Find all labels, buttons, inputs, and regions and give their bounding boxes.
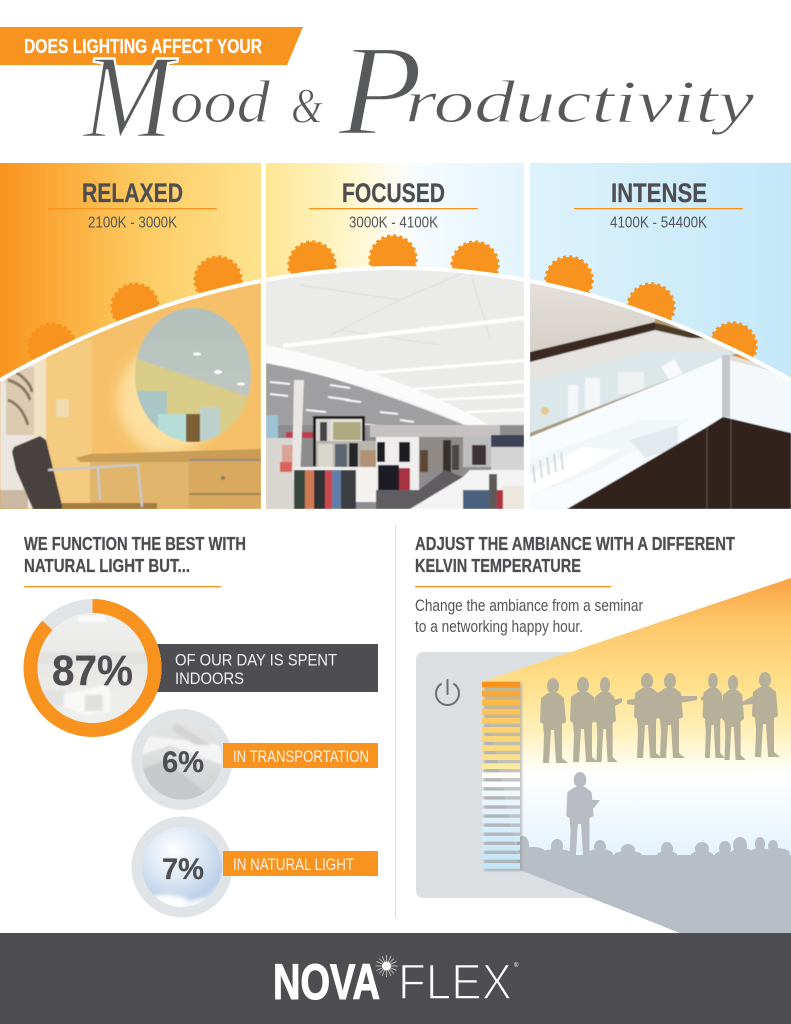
label bar natural light	[223, 851, 378, 876]
icon: suns relaxed	[28, 256, 242, 371]
circle 7%	[132, 816, 232, 918]
icon: suns intense	[545, 256, 757, 370]
logo: Nova Flex: FLEX	[398, 954, 512, 1010]
label bar indoors: INDOORS	[175, 669, 244, 688]
heading: natural light: NATURAL LIGHT BUT...	[24, 556, 190, 576]
banner text: DOES LIGHTING AFFECT YOUR	[24, 36, 262, 58]
photo: warm room with round mirror	[0, 260, 261, 509]
label bar natural light: IN NATURAL LIGHT	[233, 856, 354, 874]
panel: intense	[530, 163, 791, 509]
kelvin range relaxed: 2100K - 3000K	[88, 214, 177, 232]
white arc	[0, 268, 791, 380]
icon: suns focused	[287, 234, 500, 274]
panel: relaxed	[0, 163, 261, 509]
title banner	[0, 27, 303, 65]
donut chart 87%: 87%	[52, 647, 133, 695]
heading: intense	[574, 178, 743, 232]
stat: 87% indoors	[30, 606, 378, 730]
heading: natural light: WE FUNCTION THE BEST WITH	[24, 534, 246, 554]
script title: &	[291, 77, 323, 133]
light beam with silhouettes	[480, 578, 791, 935]
body text: ambiance: Change the ambiance from a seminar	[415, 597, 643, 615]
icon: logo star	[376, 955, 398, 977]
label bar indoors	[150, 644, 378, 692]
circle 7%: 7%	[162, 853, 204, 886]
kelvin range intense: 4100K - 54400K	[610, 214, 707, 232]
script title: roductivity	[405, 69, 754, 135]
photo: retail store ceiling and clothes	[266, 260, 524, 509]
heading: kelvin temperature: KELVIN TEMPERATURE	[415, 556, 581, 576]
heading: relaxed	[48, 178, 217, 232]
kelvin slider	[482, 682, 522, 871]
body text: ambiance	[415, 597, 643, 636]
label bar transportation: IN TRANSPORTATION	[233, 748, 369, 766]
networking crowd silhouettes	[540, 672, 780, 763]
panel: focused	[266, 163, 524, 509]
logo: Nova Flex: NOVA	[273, 954, 380, 1010]
logo: Nova Flex: ®	[514, 962, 519, 969]
label bar transportation	[223, 743, 378, 768]
control panel	[416, 652, 606, 898]
stat: 6% transportation	[132, 709, 378, 810]
donut chart 87%	[30, 606, 154, 730]
heading: kelvin temperature	[415, 534, 735, 587]
photo: jewellery display case	[530, 260, 791, 509]
icon: power button	[436, 680, 459, 705]
heading: focused	[309, 178, 478, 232]
heading: intense: INTENSE	[611, 178, 707, 208]
circle 6%: 6%	[162, 746, 204, 779]
logo: Nova Flex	[273, 954, 519, 1010]
circle 6%	[132, 709, 232, 810]
stat: 7% natural light	[132, 816, 378, 918]
kelvin range focused: 3000K - 4100K	[349, 214, 438, 232]
heading: natural light	[24, 534, 246, 587]
audience silhouettes	[517, 836, 791, 933]
body text: ambiance: to a networking happy hour.	[415, 618, 583, 636]
label bar indoors: OF OUR DAY IS SPENT	[175, 650, 337, 670]
footer	[0, 933, 791, 1024]
heading: focused: FOCUSED	[342, 178, 445, 208]
script title: P	[337, 19, 423, 163]
heading: relaxed: RELAXED	[82, 178, 183, 208]
script title: M	[81, 30, 178, 163]
script title: ood	[170, 69, 271, 135]
speaker silhouette	[566, 772, 600, 857]
script title	[81, 19, 754, 163]
